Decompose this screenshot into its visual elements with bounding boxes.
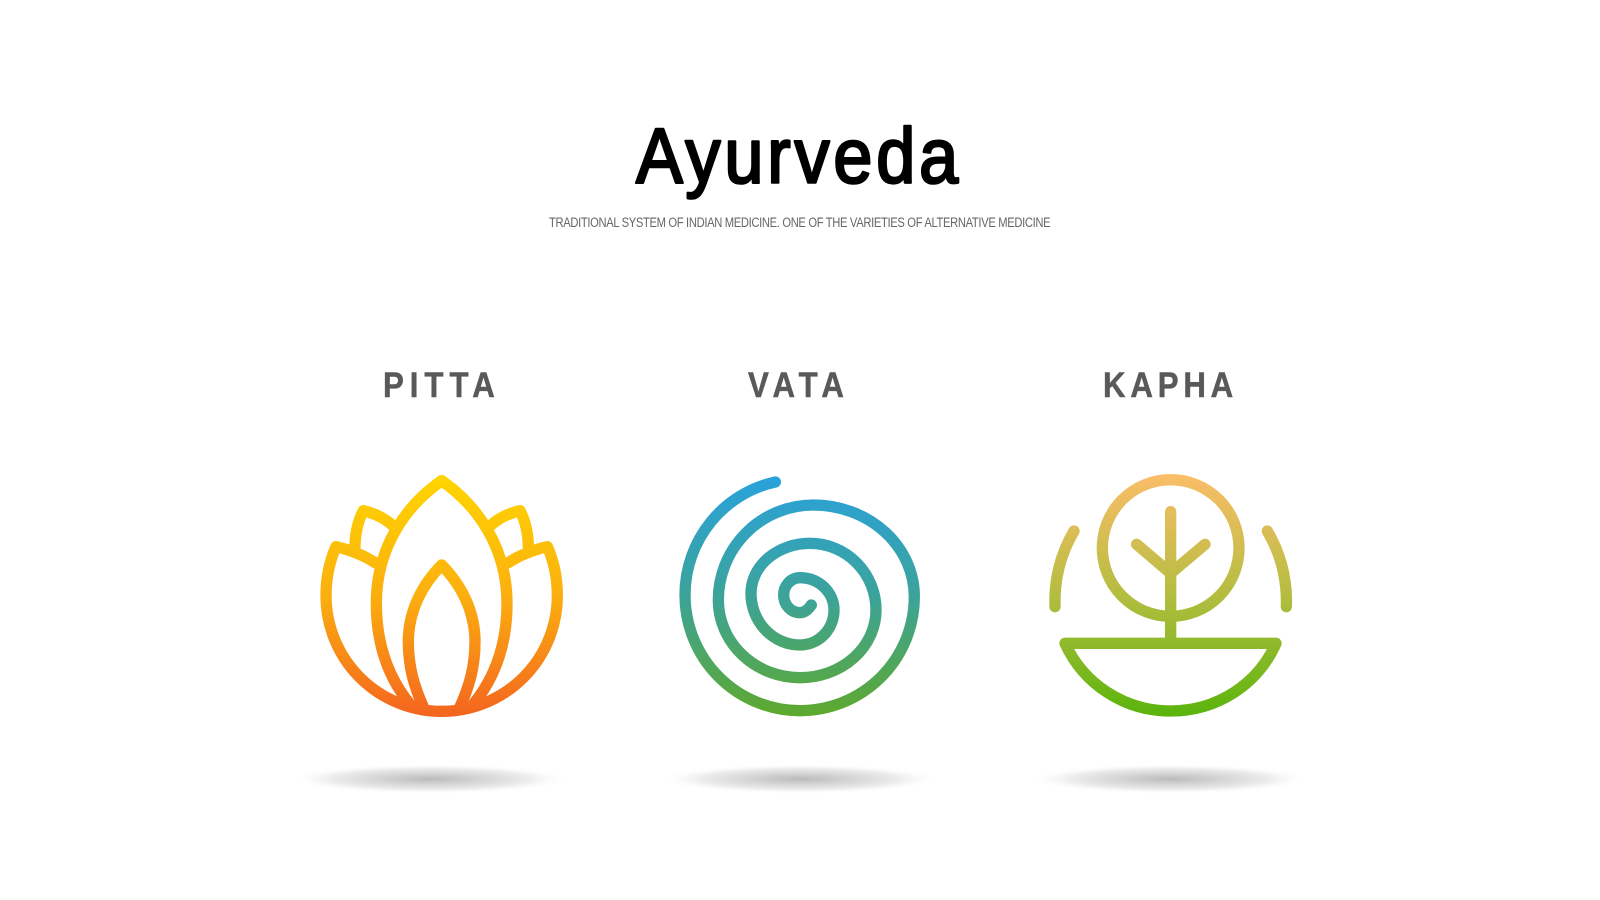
shadow: Vata xyxy=(659,764,941,794)
shadow: Kapha xyxy=(1029,764,1311,794)
shadow: Pitta xyxy=(289,764,571,794)
heading: Vata: VATA xyxy=(748,366,844,405)
heading: Kapha: KAPHA xyxy=(1103,366,1233,405)
title: Ayurveda xyxy=(636,112,959,199)
icon: lotus (Pitta) xyxy=(326,481,557,711)
icon: spiral (Vata) xyxy=(685,482,914,711)
subtitle: TRADITIONAL SYSTEM OF INDIAN MEDICINE. ONE OF THE VARIETIES OF ALTERNATIVE MEDICINE xyxy=(549,215,1051,230)
heading: Pitta: PITTA xyxy=(383,366,495,405)
icon: tree in bowl (Kapha) xyxy=(1055,480,1286,711)
